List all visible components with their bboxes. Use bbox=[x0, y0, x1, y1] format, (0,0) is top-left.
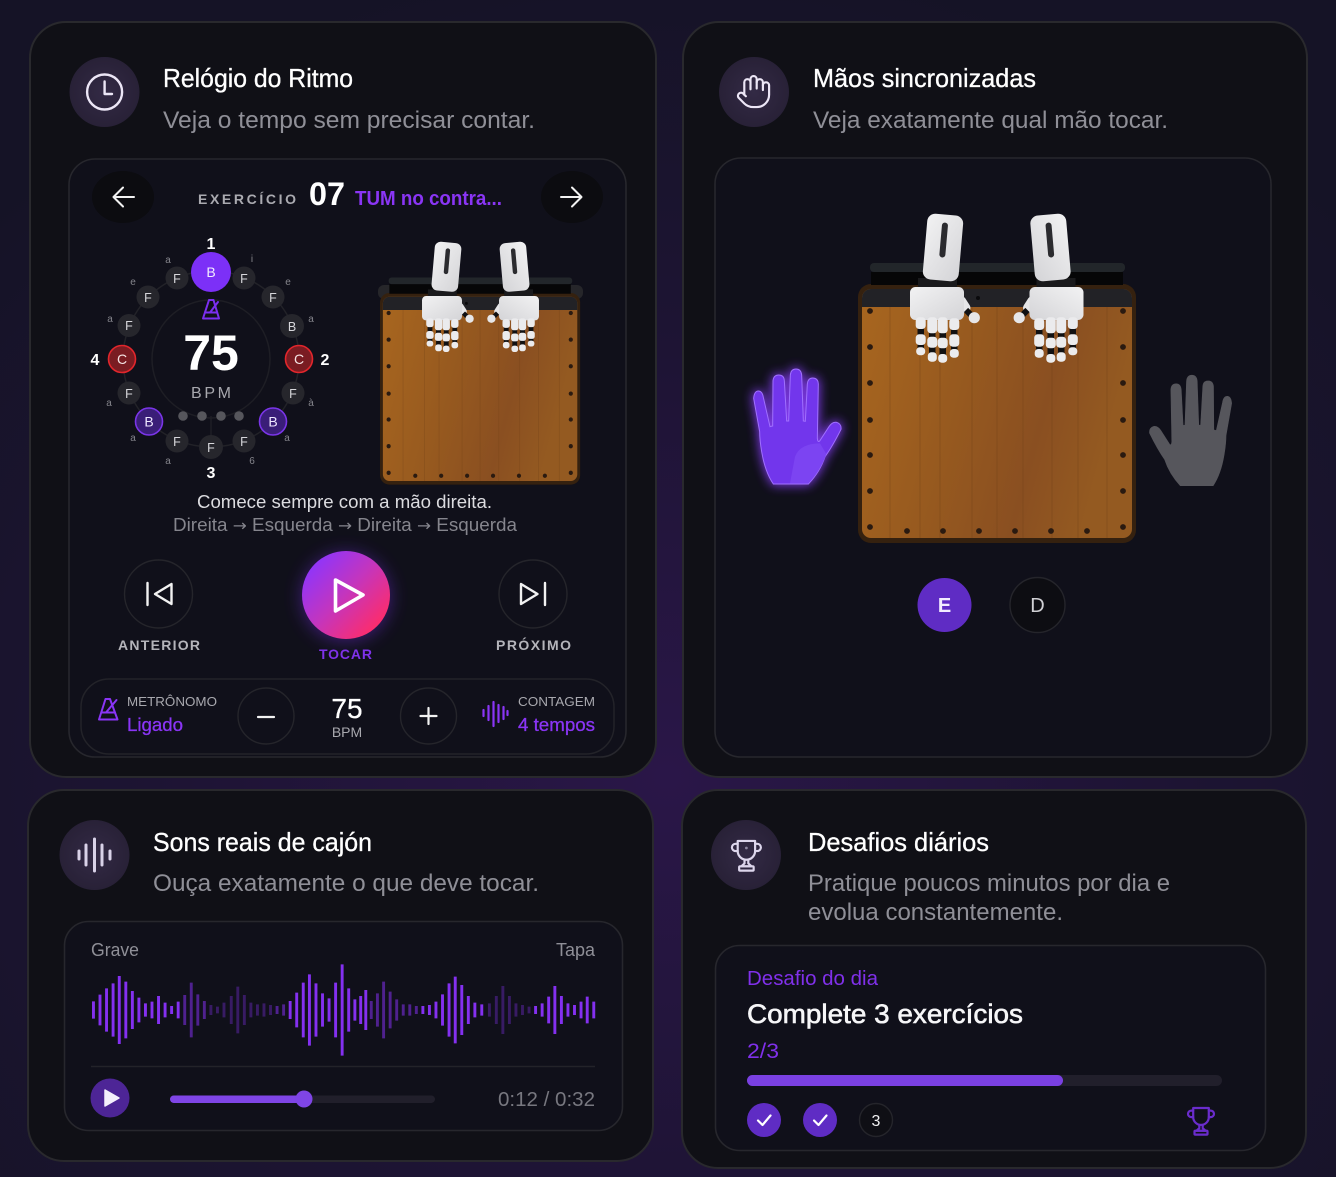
rhythm clock: a bbox=[130, 433, 136, 444]
rhythm clock bbox=[91, 236, 330, 482]
rhythm clock: F bbox=[173, 435, 181, 449]
panel: Relógio do Ritmo bbox=[30, 22, 656, 777]
step 3 pending: 3 bbox=[872, 1113, 881, 1130]
heading: Desafios diários bbox=[808, 827, 989, 857]
subtitle: evolua constantemente. bbox=[808, 899, 1063, 926]
rhythm clock: C bbox=[294, 351, 304, 367]
button: previous exercise arrow bbox=[92, 171, 154, 223]
subtitle: Veja exatamente qual mão tocar. bbox=[813, 107, 1168, 134]
card background bbox=[682, 790, 1306, 1168]
rhythm clock: 4 bbox=[91, 352, 100, 369]
label: desafio do dia: Desafio do dia bbox=[747, 968, 879, 990]
rhythm clock: a bbox=[165, 456, 171, 467]
bpm label: BPM bbox=[332, 724, 362, 740]
button: previous bbox=[124, 560, 192, 628]
icon: small trophy bbox=[1188, 1108, 1214, 1135]
rhythm clock: F bbox=[173, 272, 181, 286]
label: grave: Grave bbox=[91, 940, 139, 960]
exercise label: EXERCÍCIO bbox=[198, 191, 296, 207]
label: contagem: CONTAGEM bbox=[518, 694, 595, 709]
tempo value: 75 bbox=[183, 325, 239, 381]
rhythm clock: B bbox=[144, 414, 154, 430]
rhythm clock: C bbox=[117, 351, 127, 367]
rhythm clock: a bbox=[284, 433, 290, 444]
icon: clock bbox=[70, 57, 140, 127]
instruction text: Comece sempre com a mão direita. bbox=[197, 492, 492, 512]
progress count: 2/3 bbox=[747, 1040, 779, 1063]
rhythm clock: B bbox=[268, 414, 278, 430]
audio time: 0:12 / 0:32 bbox=[498, 1088, 595, 1111]
value: ligado: Ligado bbox=[127, 715, 183, 735]
exercise number: 07 bbox=[309, 176, 345, 212]
rhythm clock: F bbox=[125, 387, 133, 401]
button: D right hand bbox=[1010, 578, 1065, 632]
progress bar bbox=[747, 1075, 1222, 1086]
icon: left hand active bbox=[754, 369, 841, 484]
heading: Relógio do Ritmo bbox=[163, 63, 353, 93]
button: next exercise arrow bbox=[541, 171, 603, 223]
rhythm clock: e bbox=[285, 277, 291, 288]
rhythm clock: B bbox=[288, 320, 296, 334]
rhythm clock: F bbox=[269, 291, 277, 305]
rhythm clock: à bbox=[308, 398, 314, 409]
rhythm clock: F bbox=[240, 272, 248, 286]
control bar bbox=[81, 679, 614, 754]
value: 4 tempos: 4 tempos bbox=[518, 715, 595, 735]
button: next bbox=[499, 560, 567, 628]
button: audio play bbox=[90, 1078, 130, 1118]
audio player panel bbox=[64, 922, 622, 1130]
inner player panel bbox=[69, 159, 626, 757]
challenge title: Complete 3 exercícios bbox=[747, 999, 1023, 1029]
icon: beat count wave bbox=[484, 702, 508, 726]
hand order text: Direita → Esquerda → Direita → Esquerda bbox=[173, 515, 518, 535]
bpm value: 75 bbox=[331, 693, 363, 724]
icon: trophy bbox=[711, 820, 781, 890]
rhythm clock: a bbox=[106, 398, 112, 409]
waveform bbox=[93, 964, 594, 1056]
icon: sound wave bbox=[60, 820, 130, 890]
rhythm clock: 3 bbox=[207, 465, 216, 482]
rhythm clock: a bbox=[165, 255, 171, 266]
rhythm clock: F bbox=[289, 387, 297, 401]
mini cajón with hands bbox=[378, 241, 583, 485]
label: metrônomo: METRÔNOMO bbox=[127, 694, 217, 709]
icon: hand bbox=[719, 57, 789, 127]
rhythm clock: 2 bbox=[321, 352, 330, 369]
rhythm clock: F bbox=[144, 291, 152, 305]
panel: Desafios diários bbox=[682, 790, 1306, 1168]
rhythm clock: 6 bbox=[249, 456, 255, 467]
rhythm clock: B bbox=[206, 264, 216, 280]
inner hands panel bbox=[715, 158, 1271, 757]
button: play bbox=[302, 551, 390, 641]
subtitle: Ouça exatamente o que deve tocar. bbox=[153, 870, 539, 897]
rhythm clock: 1 bbox=[207, 236, 216, 253]
panel: Mãos sincronizadas bbox=[683, 22, 1307, 777]
daily challenge panel bbox=[716, 946, 1266, 1150]
subtitle: Veja o tempo sem precisar contar. bbox=[163, 107, 535, 134]
card background bbox=[28, 790, 653, 1161]
subtitle bbox=[808, 870, 1170, 926]
rhythm clock: e bbox=[130, 277, 136, 288]
icon: metronome control bbox=[99, 699, 118, 720]
icon: right hand inactive bbox=[1149, 375, 1232, 486]
rhythm clock: i bbox=[251, 254, 253, 265]
heading: Sons reais de cajón bbox=[153, 827, 372, 857]
card background bbox=[683, 22, 1307, 777]
card background bbox=[30, 22, 656, 777]
subtitle: Pratique poucos minutos por dia e bbox=[808, 870, 1170, 897]
beat dots bbox=[178, 411, 244, 421]
button: E left hand: E bbox=[938, 595, 951, 617]
button: minus bbox=[238, 688, 294, 744]
rhythm clock: F bbox=[125, 319, 133, 333]
rhythm clock: F bbox=[207, 441, 215, 455]
step 2 done bbox=[803, 1103, 837, 1137]
button: plus bbox=[400, 688, 456, 744]
label: tocar: TOCAR bbox=[319, 646, 372, 662]
tempo unit: BPM bbox=[191, 385, 231, 402]
icon: metronome bbox=[203, 300, 219, 318]
button: D right hand: D bbox=[1030, 595, 1045, 617]
rhythm clock: a bbox=[308, 314, 314, 325]
audio progress slider bbox=[170, 1090, 435, 1108]
panel: Sons reais de cajón bbox=[28, 790, 653, 1161]
large cajón with hands bbox=[858, 213, 1136, 543]
heading: Mãos sincronizadas bbox=[813, 63, 1036, 93]
step 1 done bbox=[747, 1103, 781, 1137]
label: tapa: Tapa bbox=[556, 940, 596, 960]
step 3 pending bbox=[860, 1104, 892, 1136]
button: E left hand bbox=[918, 578, 972, 632]
rhythm clock: F bbox=[240, 435, 248, 449]
rhythm clock: a bbox=[107, 314, 113, 325]
exercise name: TUM no contra... bbox=[355, 188, 502, 210]
label: anterior: ANTERIOR bbox=[118, 637, 200, 653]
label: próximo: PRÓXIMO bbox=[496, 636, 571, 653]
